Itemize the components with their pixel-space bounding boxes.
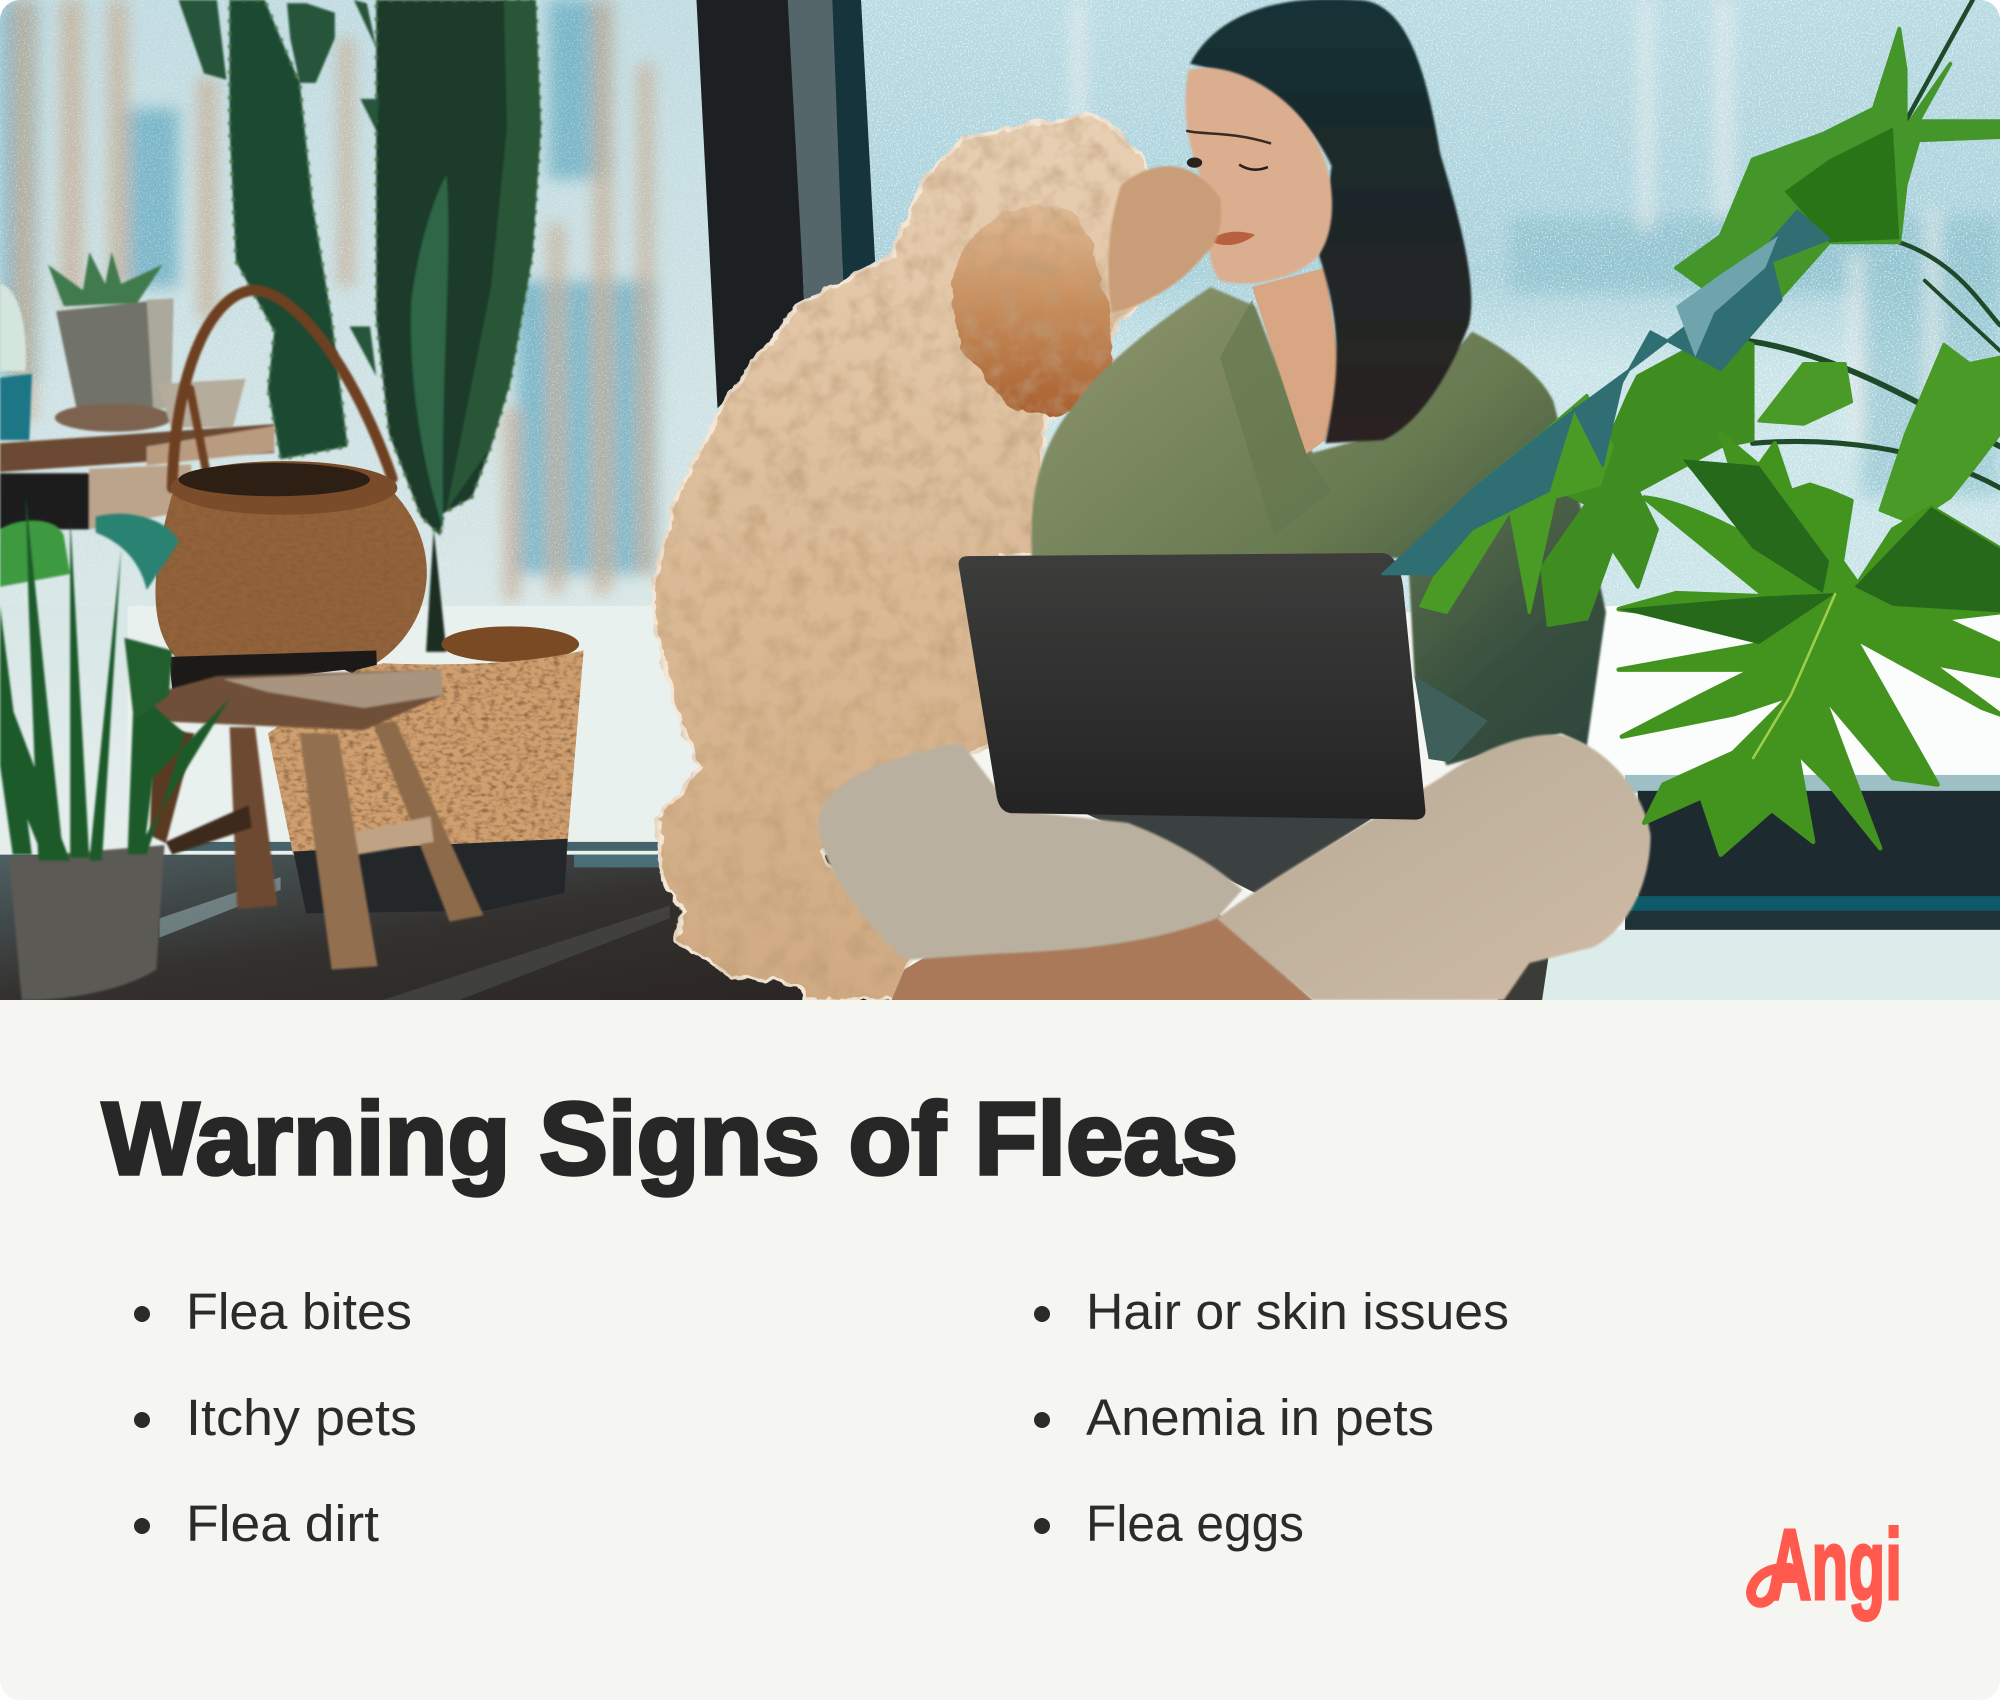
side table with potted plants — [0, 252, 274, 529]
left trouser leg — [818, 743, 1242, 960]
sleeve cuff — [1415, 676, 1488, 762]
dark shirt under laptop — [1086, 814, 1372, 893]
right trouser leg — [1217, 734, 1651, 1000]
facial features — [1186, 131, 1271, 245]
wicker basket — [155, 290, 427, 690]
right small leaves — [1759, 344, 2000, 523]
monstera plant — [1383, 0, 2000, 855]
middle leaf — [1542, 332, 1753, 625]
sweater neckline — [1220, 300, 1306, 463]
dog — [650, 111, 1158, 1000]
dog ear — [950, 206, 1112, 416]
window background, right — [847, 0, 2000, 1000]
logo: Angi: Angi — [1768, 1509, 1902, 1621]
window frame — [696, 0, 875, 408]
bullet: anemia in pets: Anemia in pets — [1086, 1389, 1434, 1446]
teal shaded leaf — [1383, 210, 1829, 574]
large leaf — [1619, 434, 2000, 855]
hanging leaf fingers — [1421, 395, 1612, 612]
bullet: itchy pets: Itchy pets — [186, 1389, 417, 1446]
woman — [1031, 0, 1606, 765]
bullet: flea eggs: Flea eggs — [1086, 1495, 1304, 1552]
foot — [892, 912, 1313, 1000]
floor — [0, 842, 893, 1001]
laptop — [959, 553, 1425, 820]
dog snout — [1108, 158, 1221, 313]
wooden stool — [147, 670, 483, 969]
cactus — [179, 0, 541, 652]
title: Warning Signs of Fleas — [102, 1081, 1238, 1196]
hair — [1190, 0, 1471, 443]
logo: Angi — [1751, 1509, 1902, 1621]
list: left column — [134, 1283, 417, 1552]
face — [1185, 68, 1332, 284]
photo: woman and dog by a window with plants — [0, 0, 2000, 1001]
bullet: hair or skin issues: Hair or skin issues — [1086, 1283, 1509, 1340]
list: right column — [1034, 1283, 1509, 1552]
neck and chest — [1252, 268, 1341, 454]
bullet: flea bites: Flea bites — [186, 1283, 412, 1340]
bullet: flea dirt: Flea dirt — [186, 1495, 379, 1552]
top leaf — [1676, 29, 2000, 332]
rope planter — [268, 626, 584, 913]
shadow behind the far leg — [1497, 957, 1549, 1000]
window background, left — [0, 0, 765, 893]
front potted plant — [0, 494, 230, 1000]
trousers and laptop — [818, 553, 1651, 1000]
plant stems — [1721, 0, 2000, 488]
sweater — [1031, 287, 1606, 765]
